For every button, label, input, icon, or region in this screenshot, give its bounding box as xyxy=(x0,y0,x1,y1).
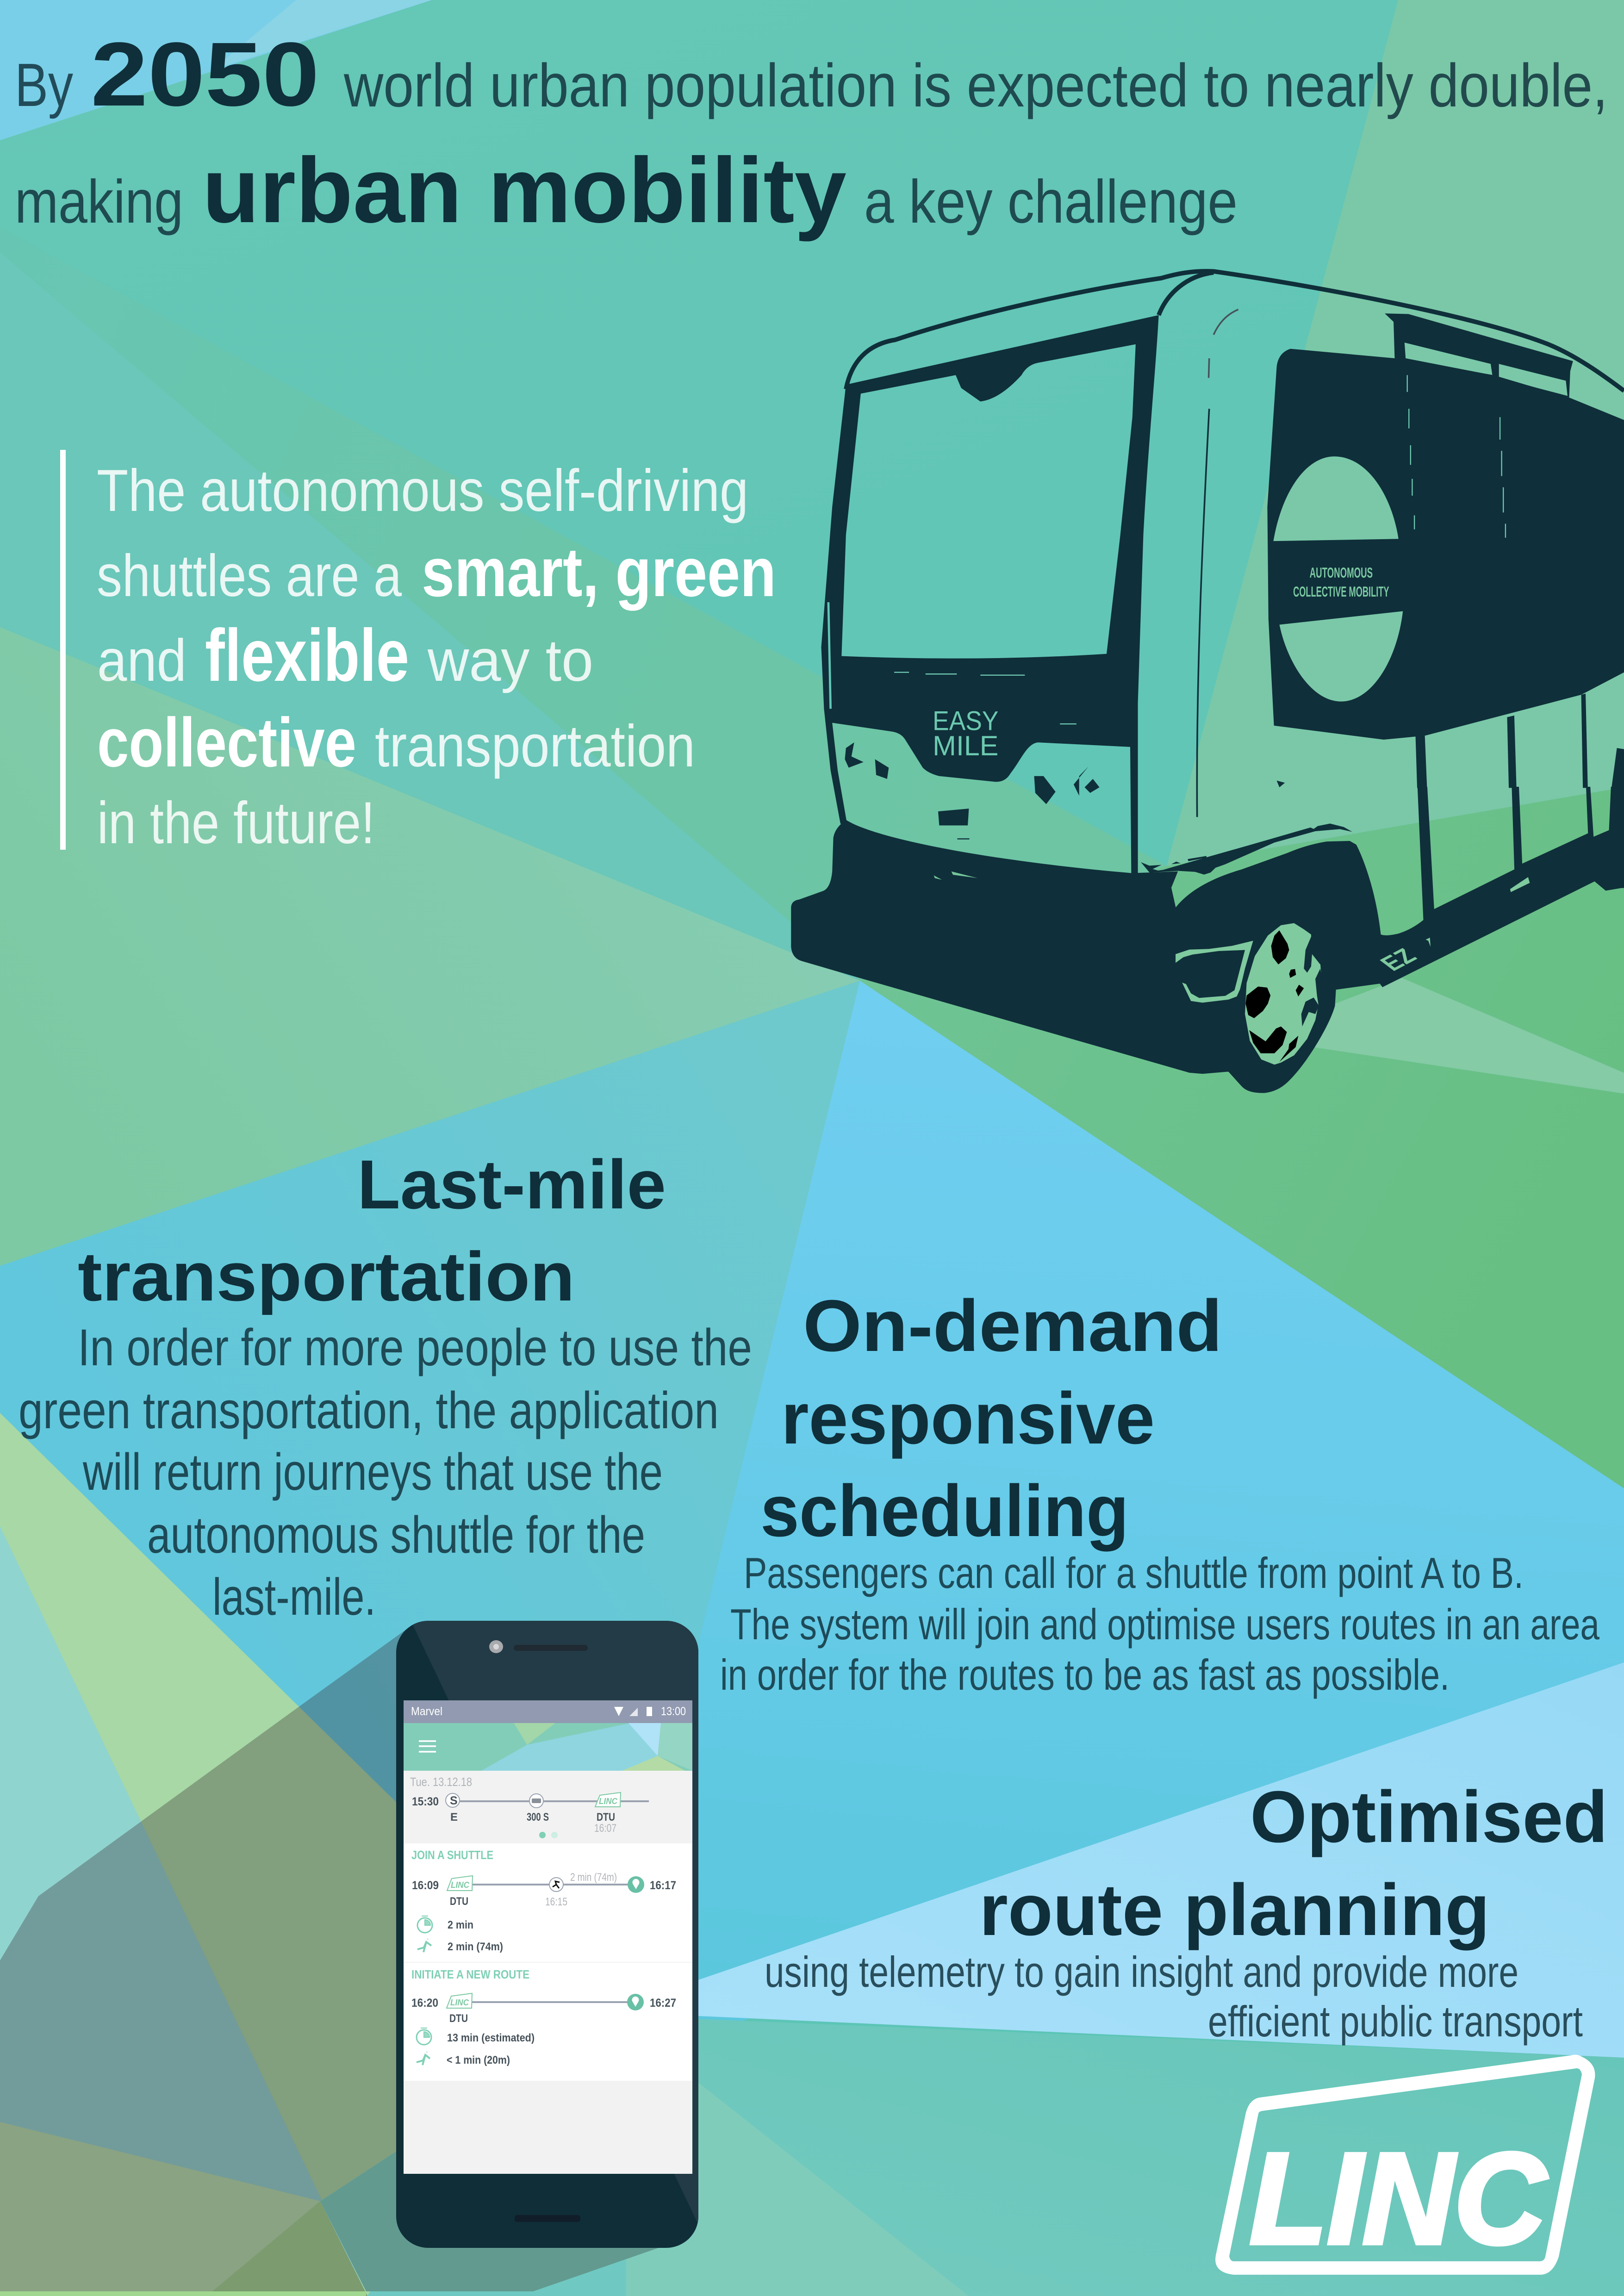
heading: On-demand responsive scheduling xyxy=(760,1285,1222,1552)
heading: Optimised route planning: Optimised xyxy=(1250,1776,1608,1858)
initiate a new route card xyxy=(404,1963,692,2081)
title line 1: 2050 xyxy=(91,24,319,125)
illustration: EasyMile autonomous shuttle xyxy=(791,271,1624,1093)
text: last-mile description: autonomous shuttle for the xyxy=(147,1506,645,1564)
initiate a new route card: LINC xyxy=(450,1998,469,2007)
current trip card: LINC xyxy=(599,1797,618,1806)
quote block: collective xyxy=(97,703,356,781)
heading: Optimised route planning xyxy=(979,1776,1608,1951)
join a shuttle card: 16:15 xyxy=(545,1896,567,1908)
current trip card: 300 S xyxy=(527,1811,549,1823)
heading: Last-mile transportation: transportation xyxy=(78,1238,575,1315)
bumper marks xyxy=(934,871,977,880)
pale highlights xyxy=(828,375,1506,724)
join a shuttle card: LINC xyxy=(451,1880,470,1890)
phone body xyxy=(396,1615,703,2248)
title line 2: making xyxy=(15,168,183,236)
current trip card: Tue. 13.12.18 xyxy=(410,1775,472,1789)
join a shuttle card: 2 min xyxy=(448,1919,473,1931)
windscreen frame and front mask xyxy=(821,315,1159,873)
side panel with round sign xyxy=(1267,349,1624,740)
roof rack xyxy=(1385,313,1573,398)
EasyMile logo: MILE xyxy=(933,730,998,761)
current trip card: DTU xyxy=(597,1811,615,1823)
quote block: shuttles are a xyxy=(97,543,402,609)
text: last-mile description xyxy=(19,1319,752,1626)
initiate a new route card: INITIATE A NEW ROUTE xyxy=(411,1967,529,1981)
current trip card: 15:30 xyxy=(412,1795,439,1808)
initiate a new route card: DTU xyxy=(449,2012,468,2025)
text: last-mile description: last-mile. xyxy=(212,1568,376,1626)
heading: On-demand responsive scheduling: On-demand xyxy=(803,1285,1222,1367)
map header xyxy=(404,1723,692,1771)
title line 2: a key challenge xyxy=(864,168,1238,236)
heading: On-demand responsive scheduling: responsive xyxy=(781,1378,1155,1459)
status bar: 13:00 xyxy=(661,1705,686,1718)
join a shuttle card: 2 min (74m) xyxy=(570,1871,617,1884)
heading: Optimised route planning: route planning xyxy=(979,1869,1490,1951)
heading: Last-mile transportation xyxy=(78,1145,666,1315)
join a shuttle card xyxy=(404,1843,692,1962)
side badge: EZ xyxy=(1374,944,1423,975)
body details xyxy=(958,310,1238,839)
text: on-demand description: in order for the routes to be as fast as possible. xyxy=(720,1650,1450,1699)
window struts xyxy=(1415,694,1624,793)
quote block: The autonomous self-driving xyxy=(97,458,748,524)
quote block: transportation xyxy=(375,713,695,779)
title line 1: By xyxy=(15,51,73,119)
initiate a new route card: 16:20 xyxy=(411,1997,438,2010)
quote block xyxy=(60,450,776,856)
current trip card xyxy=(410,1775,649,1838)
text: last-mile description: will return journeys that use the xyxy=(82,1443,663,1501)
roof outline xyxy=(846,271,1624,391)
sill details xyxy=(1425,877,1530,947)
text: route planning description xyxy=(765,1948,1583,2046)
body side and skirt xyxy=(1144,787,1624,1093)
EasyMile logo xyxy=(933,706,998,761)
heading: On-demand responsive scheduling: scheduling xyxy=(760,1470,1129,1552)
initiate a new route card: 16:27 xyxy=(650,1997,676,2010)
join a shuttle card: JOIN A SHUTTLE xyxy=(411,1848,493,1862)
headlight outline xyxy=(1176,941,1253,1002)
sign lettering xyxy=(1293,565,1389,600)
shuttle lower side, wheel arch and wheel xyxy=(1141,787,1624,1093)
quote block: way to xyxy=(427,628,593,694)
quote block: flexible xyxy=(205,614,409,697)
initiate a new route card: < 1 min (20m) xyxy=(447,2054,510,2066)
join a shuttle card: 16:09 xyxy=(412,1879,439,1892)
camera and speakers xyxy=(489,1640,588,2222)
EasyMile logo: EASY xyxy=(933,706,998,736)
current trip card: 16:07 xyxy=(594,1822,616,1835)
status bar: Marvel xyxy=(411,1705,442,1718)
title line 1 xyxy=(15,24,1608,125)
wheel spokes xyxy=(1301,931,1327,1027)
text: on-demand description xyxy=(720,1549,1600,1699)
logo: LINC: LINC xyxy=(1250,2127,1547,2271)
join a shuttle card: DTU xyxy=(450,1895,468,1908)
arch trim line xyxy=(1141,823,1352,875)
title line 2: urban mobility xyxy=(202,139,846,242)
current trip card: E xyxy=(450,1811,458,1823)
join a shuttle card: 16:17 xyxy=(650,1879,676,1892)
text: last-mile description: green transportation, the application xyxy=(19,1381,719,1439)
title xyxy=(15,24,1608,242)
join a shuttle card: 2 min (74m) xyxy=(448,1941,503,1953)
sign lettering: AUTONOMOUS xyxy=(1310,565,1373,581)
shuttle upper body and front xyxy=(791,271,1624,1074)
sign lettering: COLLECTIVE MOBILITY xyxy=(1293,584,1389,600)
wheel hub xyxy=(1245,923,1322,1064)
front lamps and plate xyxy=(845,742,1285,826)
quote block: and xyxy=(97,628,187,694)
phone mockup xyxy=(396,1615,703,2248)
screen base xyxy=(404,1700,692,2174)
initiate a new route card: 13 min (estimated) xyxy=(447,2032,535,2044)
logo: LINC xyxy=(1215,2055,1595,2275)
quote block: in the future! xyxy=(97,790,375,856)
wheel openings xyxy=(1245,930,1304,1062)
text: last-mile description: In order for more people to use the xyxy=(78,1319,752,1376)
status bar xyxy=(404,1700,692,1723)
heading: Last-mile transportation: Last-mile xyxy=(357,1145,666,1223)
front bumper xyxy=(791,820,1228,1074)
title line 2 xyxy=(15,139,1238,242)
quote block: smart, green xyxy=(422,533,776,611)
current trip card: S xyxy=(450,1794,458,1807)
